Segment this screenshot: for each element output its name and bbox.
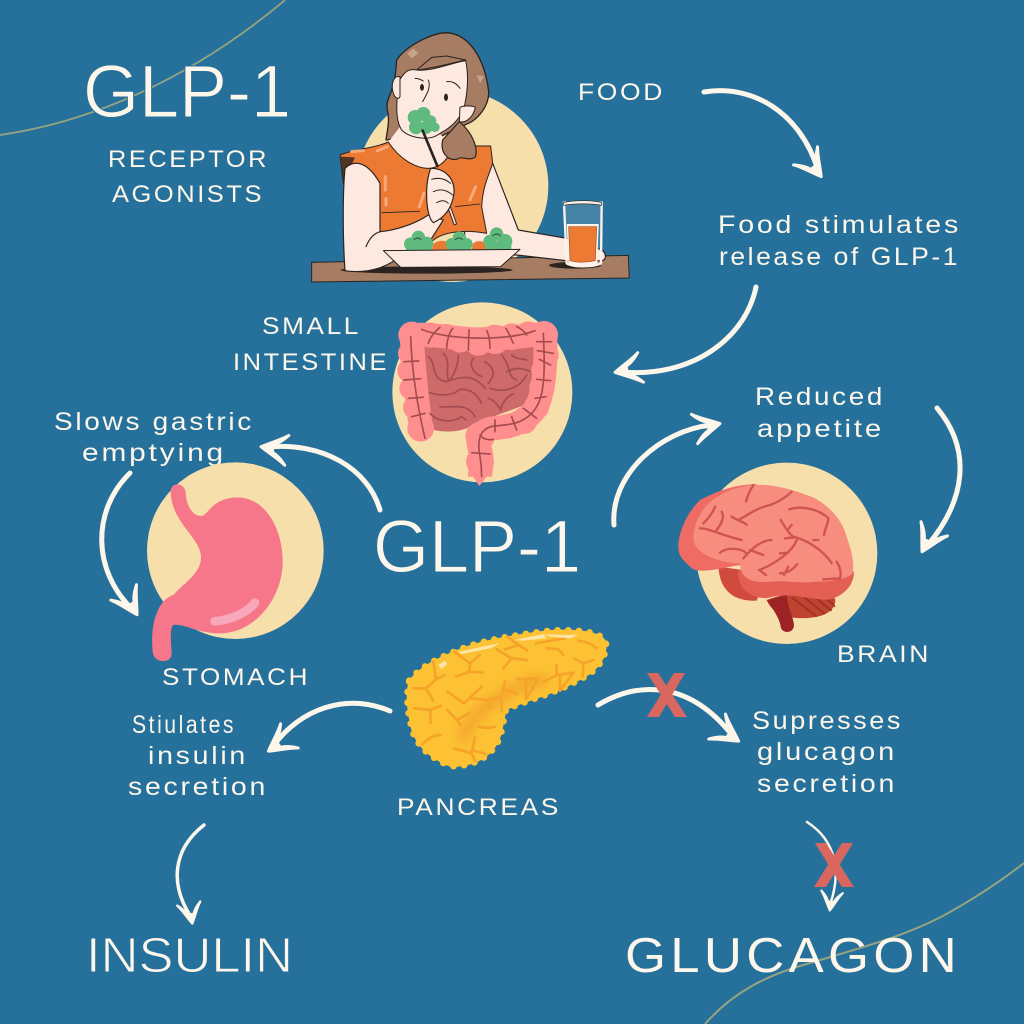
label: suppresses glucagon secretion [752, 707, 903, 798]
label: pancreas: PANCREAS [397, 794, 561, 821]
subtitle: receptor agonists: AGONISTS [112, 181, 264, 208]
arrow: GLP-1 to slows gastric emptying [259, 432, 380, 510]
arrow: glucagon secretion to glucagon, blocked [807, 822, 854, 912]
label: small intestine [233, 313, 389, 376]
arrow: food to release [704, 91, 833, 186]
label: food: FOOD [578, 79, 665, 106]
label: stimulates insulin secretion: Stiulates [132, 711, 236, 739]
label: slows gastric emptying: Slows gastric [54, 408, 254, 436]
label: slows gastric emptying: emptying [82, 439, 226, 467]
label: suppresses glucagon secretion: secretion [757, 770, 897, 798]
arrow: insulin secretion to insulin [177, 825, 204, 926]
arrow: reduced appetite to brain [909, 408, 960, 559]
icon: woman eating [312, 33, 629, 282]
arrow: GLP-1 to reduced appetite [614, 409, 723, 525]
label: stomach: STOMACH [162, 664, 310, 691]
icon: brain [678, 463, 877, 644]
label: slows gastric emptying [54, 408, 254, 467]
label: stimulates insulin secretion: secretion [128, 773, 268, 801]
label: suppresses glucagon secretion: glucagon [757, 738, 897, 766]
subtitle: receptor agonists: RECEPTOR [108, 146, 269, 173]
subtitle: receptor agonists [108, 146, 269, 208]
icon: small intestine [392, 302, 572, 486]
text: food stimulates release [718, 211, 961, 271]
label: suppresses glucagon secretion: Supresses [752, 707, 903, 735]
arrow: pancreas to insulin secretion [260, 703, 390, 763]
arrow: release to small intestine [612, 287, 756, 387]
label: small intestine: SMALL [262, 313, 361, 340]
icon: pancreas [407, 630, 606, 766]
label: stimulates insulin secretion: insulin [148, 742, 248, 770]
label: reduced appetite: Reduced [755, 383, 885, 411]
text: food stimulates release: release of GLP-1 [719, 243, 960, 271]
label: small intestine: INTESTINE [233, 349, 389, 376]
label: glucagon: GLUCAGON [625, 929, 961, 983]
icon: stomach [147, 462, 324, 661]
center heading: GLP-1: GLP-1 [373, 505, 581, 588]
title: GLP-1: GLP-1 [83, 50, 291, 133]
label: stimulates insulin secretion [128, 711, 268, 801]
label: brain: BRAIN [837, 641, 931, 668]
arrow: pancreas to glucagon secretion, blocked [598, 673, 747, 754]
label: reduced appetite: appetite [757, 415, 884, 443]
label: reduced appetite [755, 383, 885, 443]
label: insulin: INSULIN [86, 929, 293, 983]
text: food stimulates release: Food stimulates [718, 211, 961, 239]
arrow: gastric emptying to stomach [102, 473, 150, 622]
